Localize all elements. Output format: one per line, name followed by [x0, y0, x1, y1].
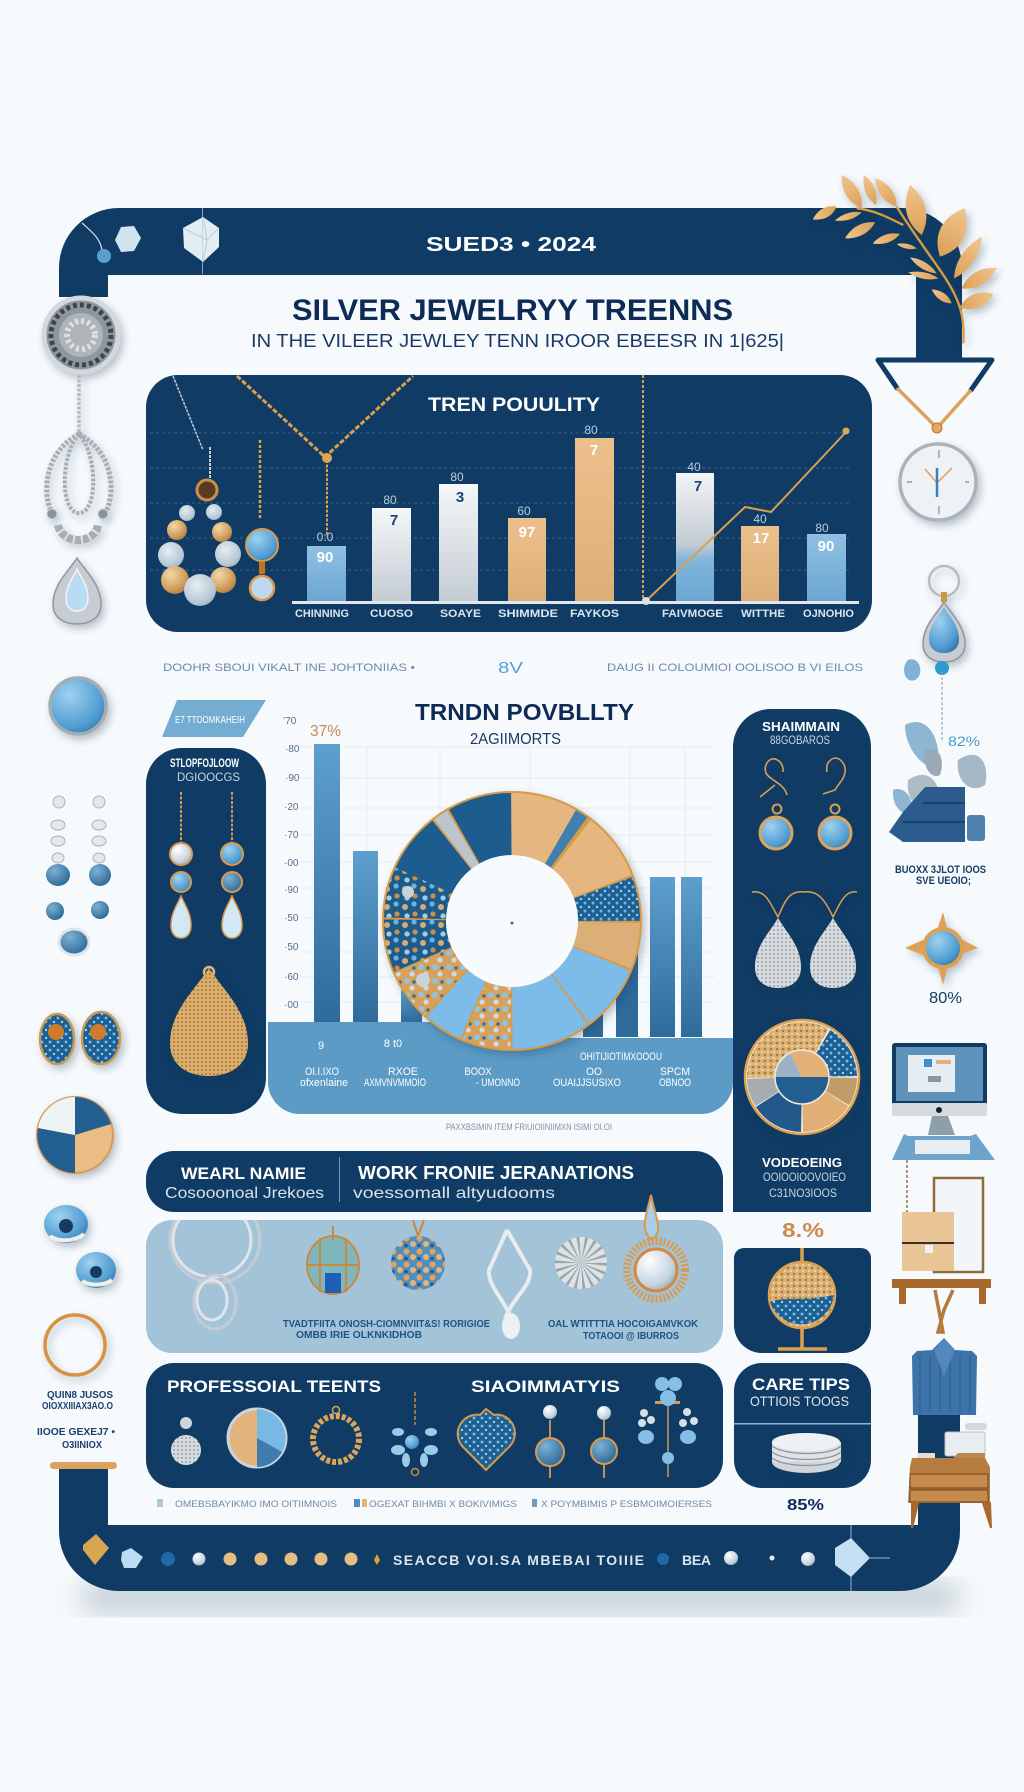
beads right [724, 1551, 815, 1566]
icon: left blue cabochon [50, 678, 106, 734]
icon: gold bead ring [313, 1406, 359, 1462]
pendants caption left: TVADTFIITA ONOSH-CIOMNVIIT&S! RORIGIOE [283, 1319, 490, 1330]
icon: blue heart pendant [458, 1409, 515, 1470]
icon: bead cluster pin [638, 1377, 698, 1477]
panel: work and wear header [146, 1151, 723, 1212]
light blue base band [268, 1022, 733, 1114]
bar value labels: 90 [818, 538, 834, 555]
icon: silver ring stack [772, 1433, 841, 1473]
panel heading: STLOPFOJLOOW [170, 756, 239, 770]
pendants caption left [283, 1319, 699, 1342]
bar value labels: 7 [694, 478, 702, 495]
y axis labels: ·00 [284, 1000, 299, 1011]
legend row: OGEXAT BIHMBI X BOKIVIMIGS [369, 1499, 517, 1509]
y axis labels: ·60 [284, 972, 299, 983]
caption row: DAUG II COLOUMIOI OOLISOO B VI EILOS [607, 662, 863, 674]
subheading: OTTIOIS TOOGS [750, 1393, 849, 1409]
text: left column caption: OIOXXIIIAX3AO.O [42, 1401, 113, 1412]
bar category labels: OJNOHIO [803, 608, 854, 620]
icon: left pie brooch [37, 1097, 113, 1173]
value label: 37% [310, 723, 341, 740]
footnote: PAXXBSIMIN ITEM FRIUIOIINIIMXN ISIMI OI.OI [446, 1122, 612, 1132]
icon: plant and box stack [889, 722, 986, 842]
icon: sunburst gem [905, 912, 978, 985]
icon: desktop computer [892, 1043, 995, 1160]
icon: orange and blue studs [40, 1012, 120, 1064]
y axis labels: ·90 [285, 773, 300, 784]
text: lower panel labels: VODEOEING [762, 1155, 842, 1170]
frame: navy border band [59, 208, 962, 1591]
bar category labels: CHINNING [295, 608, 349, 620]
text: panel description: OOIOOIOOVOIEO [763, 1170, 846, 1184]
bar value labels: 90 [317, 549, 333, 566]
heading left: WEARL NAMIE [181, 1164, 306, 1183]
band labels: RXOE [388, 1066, 418, 1078]
bar value labels: 80 [383, 493, 397, 507]
chart subheading: 2AGIIMORTS [470, 731, 561, 748]
legend row: OMEBSBAYIKMO IMO OITIIMNOIS [175, 1499, 337, 1509]
icon: hook earrings [760, 758, 851, 849]
text: left column caption [37, 1390, 115, 1451]
text: box stack caption: BUOXX 3JLOT IOOS [895, 864, 986, 876]
heading right: WORK FRONIE JERANATIONS [358, 1163, 634, 1183]
icon: silver disc [555, 1237, 607, 1289]
y axis labels: ·00 [284, 858, 299, 869]
panel: right earrings sidebar [733, 709, 871, 1212]
icon: gold mesh drop [170, 967, 248, 1076]
subtitle: IN THE VILEER JEWLEY TENN IROOR EBEESR IN 1|625| [251, 331, 784, 351]
caption row [163, 660, 863, 677]
icon: silver mesh drops [752, 892, 857, 988]
icon: small leaves under pendant [904, 659, 949, 681]
y axis labels [283, 716, 300, 1011]
tag: parallelogram label [162, 700, 266, 737]
dashed connector [941, 672, 943, 740]
y axis labels: ·50 [284, 942, 299, 953]
icon: bead bracelet [158, 480, 241, 606]
subheading left: Cosooonoal Jrekoes [165, 1185, 324, 1202]
icon: footer right gem [835, 1525, 890, 1591]
band labels: 8 t0 [384, 1038, 402, 1050]
y axis labels: ·50 [284, 913, 299, 924]
bar value labels: 60 [517, 504, 531, 518]
icon: gold laurel branch [811, 172, 1000, 343]
legend row [157, 1499, 712, 1509]
band labels: - UMONNO [476, 1077, 520, 1089]
top-right watch pendant with hanger [878, 360, 992, 520]
bar category labels: FAYKOS [570, 608, 619, 620]
panel: pendants showcase [146, 1195, 723, 1353]
band labels: OI.I.IXO [305, 1066, 339, 1078]
icon: top-left gems and wire [82, 207, 219, 274]
band labels: OHITIJIOTIMXOOOU [580, 1051, 662, 1063]
band labels: OBNOO [659, 1077, 691, 1089]
icon: blue flower beads [44, 1205, 116, 1288]
y axis labels: ’70 [283, 716, 297, 727]
icon: silver hoop rings [168, 1220, 262, 1330]
icon: flower cluster pendant [391, 1220, 445, 1290]
header label: SUED3 • 2024 [426, 234, 597, 256]
band labels: OUAIJJSUSIXO [553, 1077, 621, 1089]
bar category labels: WITTHE [741, 608, 785, 620]
bar category labels [295, 608, 854, 620]
band labels: 9 [318, 1040, 324, 1052]
bar category labels: SOAYE [440, 608, 481, 620]
band labels [300, 1038, 691, 1089]
icon: gold bar on frame end [50, 1462, 117, 1469]
bar value labels: 7 [390, 512, 398, 529]
icon: package, frame and shelf [892, 1178, 991, 1332]
bar category labels: CUOSO [370, 608, 413, 620]
panel: trend popularity bar chart [146, 375, 872, 632]
panel: left earrings [146, 748, 266, 1114]
icon: blue gem pendant [246, 529, 278, 600]
frame shadow [80, 1580, 960, 1614]
bar value labels: 40 [753, 512, 767, 526]
icon: pearl pins [536, 1405, 617, 1478]
icon: drop earrings [170, 792, 243, 938]
icon: diamond pendant [171, 1417, 201, 1465]
heading left: PROFESSOIAL TEENTS [167, 1377, 381, 1396]
panel: gold and blue globe [734, 1248, 871, 1353]
bar category labels: FAIVMOGE [662, 608, 723, 620]
footer dot [657, 1553, 669, 1565]
pendants caption left: OAL WTITTTIA HOCOIGAMVKOK [548, 1319, 699, 1330]
icon: blue flower pendant [391, 1392, 438, 1476]
panel subheading: DGIOOCGS [177, 770, 240, 784]
icon: gold sun pendant [627, 1195, 685, 1299]
legend row: X POYMBIMIS P ESBMOIMOIERSES [541, 1499, 712, 1509]
caption row: DOOHR SBOUI VIKALT INE JOHTONIIAS • [163, 662, 415, 674]
icon: right blue teardrop key pendant [923, 566, 965, 662]
bar value labels: 97 [519, 524, 535, 541]
caption row: 8V [498, 660, 523, 677]
heading: CARE TIPS [752, 1375, 850, 1394]
bar value labels [317, 423, 834, 566]
bar value labels: 3 [456, 489, 464, 506]
chart: trend popularity composite [268, 699, 733, 1114]
icon: left silver brooch and necklace [44, 298, 118, 624]
icon: gold cage pendant [307, 1226, 359, 1294]
pendants caption left: TOTAOOI @ IBURROS [583, 1331, 679, 1342]
band labels: BOOX [464, 1066, 492, 1078]
y axis labels: ·70 [284, 830, 299, 841]
panel: care tips [734, 1363, 871, 1488]
footer text: SEACCB VOI.SA MBEBAI TOIIIE [393, 1552, 644, 1568]
value label: gold globe: 8.% [782, 1220, 824, 1242]
icon: pale gem [121, 1548, 143, 1568]
bar value labels: 80 [450, 470, 464, 484]
footer bar items [83, 1525, 890, 1591]
band labels: ofxenlaine [300, 1077, 348, 1089]
icon: gold hoop [45, 1315, 105, 1375]
heading right: SIAOIMMATYIS [471, 1377, 620, 1396]
bar category labels: SHIMMDE [498, 608, 558, 620]
subheading right: voessomall altyudooms [353, 1185, 555, 1202]
icon: silver wire pendant [489, 1230, 530, 1339]
dashed connector [906, 1160, 908, 1212]
text: box stack caption: SVE UEOIO; [916, 875, 971, 887]
heading: SHAIMMAIN [762, 719, 840, 734]
bar value labels: 0:0 [317, 530, 334, 544]
bar value labels: 40 [687, 460, 701, 474]
subheading: 88GOBAROS [770, 733, 830, 747]
value label: 85% [787, 1497, 824, 1514]
y axis labels: ·80 [285, 744, 300, 755]
y axis labels: ·90 [284, 885, 299, 896]
text: box stack caption [895, 864, 986, 887]
heading: TREN POUULITY [428, 395, 600, 416]
donut chart [382, 791, 642, 1051]
beads row [161, 1552, 380, 1566]
band labels: AXMVNVMMOIO [364, 1077, 426, 1089]
bar value labels: 7 [590, 442, 598, 459]
value label: 80% [929, 990, 962, 1007]
icon: gold and silver necklaces [173, 375, 850, 605]
bar value labels: 17 [753, 530, 769, 547]
icon: jewelry pie dial [745, 1020, 859, 1134]
bars [314, 744, 702, 1037]
bar value labels: 80 [584, 423, 598, 437]
text: panel description second line: C31NO3IOOS [769, 1186, 837, 1200]
band labels: SPCM [660, 1066, 690, 1078]
y axis labels: ·20 [284, 802, 299, 813]
value label: 82% [948, 733, 980, 749]
icon: blue sweater [912, 1338, 977, 1415]
text: left column caption: QUIN8 JUSOS [47, 1390, 113, 1401]
band labels: OO [586, 1066, 602, 1078]
bar value labels: 80 [815, 521, 829, 535]
title: SILVER JEWELRYY TREENNS [292, 294, 733, 327]
footer text short: BEA [682, 1552, 711, 1568]
pendants caption left: OMBB IRIE OLKNKIDHOB [296, 1330, 422, 1341]
chart heading: TRNDN POVBLLTY [415, 699, 634, 725]
panel: professional trends [146, 1363, 723, 1488]
icon: machine and dresser [908, 1423, 991, 1528]
icon: pie brooch [228, 1409, 286, 1467]
bars [292, 438, 859, 604]
tag: parallelogram label: E7 TTOOMKAHEIH [175, 715, 245, 726]
text: left column caption: IIOOE GEXEJ7 • [37, 1427, 115, 1438]
icon: left bead earrings [46, 796, 111, 955]
icon: gold gem [83, 1534, 109, 1565]
text: left column caption: O3IINIOX [62, 1440, 102, 1451]
